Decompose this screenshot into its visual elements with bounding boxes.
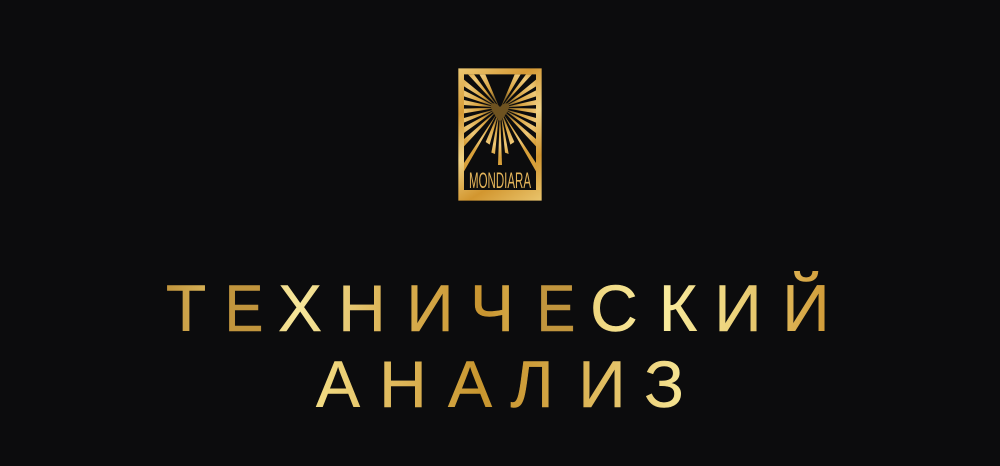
title line 2: А — [316, 347, 360, 421]
logo wordmark: MONDIARA — [469, 168, 531, 193]
title line 2 — [316, 347, 684, 421]
title line 1: С — [590, 271, 638, 345]
title line 1: Т — [166, 271, 206, 345]
title line 2: Л — [510, 347, 554, 421]
logo frame — [458, 68, 542, 201]
title line 2: З — [644, 347, 684, 421]
title line 2: А — [448, 347, 492, 421]
title line 1: Н — [338, 271, 386, 345]
title line 2: Н — [379, 347, 427, 421]
title line 1 — [166, 270, 830, 346]
logo: Mondiara emblem — [458, 68, 542, 201]
title line 1: Е — [225, 273, 263, 346]
title line 1: Х — [278, 271, 322, 345]
title line 1: И — [714, 271, 762, 345]
title line 2: И — [578, 347, 626, 421]
title line 1: И — [406, 271, 454, 345]
title line 1: Ч — [470, 271, 514, 345]
logo sunburst rays — [464, 74, 536, 171]
logo heart centre — [491, 103, 509, 122]
title line 1: К — [659, 271, 698, 345]
title line 1: Е — [537, 273, 575, 346]
title line 1: Й — [782, 270, 830, 345]
